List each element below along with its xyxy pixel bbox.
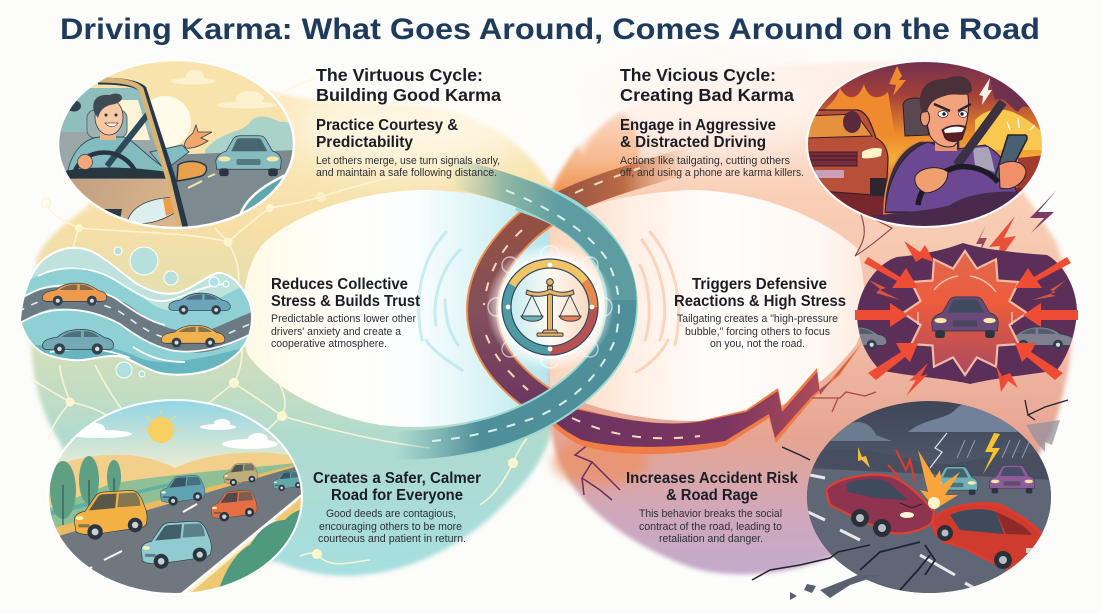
orange car	[42, 283, 107, 306]
driver head	[95, 99, 123, 135]
orange glow below lower road	[552, 438, 648, 486]
head rest	[903, 98, 929, 136]
indicator	[163, 198, 174, 216]
panel: vicious cycle lobe	[550, 60, 1071, 574]
steering wheel	[918, 167, 998, 205]
scene: flowing calm traffic	[15, 245, 255, 380]
scene: sunny safe highway	[45, 400, 305, 600]
arrow right	[1023, 303, 1078, 327]
subheading line 2: Stress & Builds Trust	[271, 293, 420, 310]
sun	[148, 417, 174, 443]
body line 3: on you, not the road.	[710, 338, 805, 350]
subheading line 1: Engage in Aggressive	[620, 117, 776, 134]
distant hills	[805, 450, 1055, 490]
subheading line 1: Increases Accident Risk	[626, 470, 798, 487]
rain	[957, 440, 1030, 458]
fist on wheel	[915, 168, 948, 193]
yellow verge	[45, 462, 305, 548]
road edge	[178, 495, 302, 597]
road dashes	[188, 174, 215, 188]
panel: virtuous cycle lobe	[30, 62, 552, 576]
eyes	[938, 111, 968, 117]
scene border	[48, 400, 302, 594]
subheading line 1: Triggers Defensive	[692, 276, 827, 293]
shouting mouth	[942, 125, 966, 142]
road	[45, 464, 305, 600]
body line 3: cooperative atmosphere.	[271, 338, 387, 350]
body line 3: retaliation and danger.	[659, 533, 763, 545]
pale teal car	[141, 521, 211, 569]
small interior mirror	[70, 100, 81, 112]
waving hand	[184, 125, 212, 148]
road edge	[482, 203, 560, 412]
white lightning	[930, 433, 947, 468]
road dashes	[484, 168, 700, 438]
body line 1: This behavior breaks the social	[639, 508, 782, 520]
explosion core	[928, 497, 940, 509]
yellow-orange car lower	[161, 325, 225, 348]
body line 2: bubble," forcing others to focus	[685, 326, 830, 338]
ear	[920, 110, 930, 126]
heading: the virtuous cycle: The Virtuous Cycle:	[316, 65, 483, 85]
grey shoulder highlight	[973, 147, 995, 172]
clouds	[171, 70, 277, 108]
lane dashes	[86, 478, 250, 571]
tan car	[224, 463, 257, 486]
angry brows	[934, 104, 971, 111]
road edge	[470, 195, 621, 438]
road dashes	[22, 302, 250, 338]
dashboard	[860, 192, 1022, 240]
heading line 2: Building Good Karma	[316, 85, 501, 105]
subheading line 1: Creates a Safer, Calmer	[313, 470, 481, 487]
white wave lines	[15, 268, 255, 362]
upper segment	[560, 160, 690, 205]
tree trunks	[63, 478, 114, 525]
sun rays	[142, 410, 181, 444]
smile	[105, 123, 118, 127]
dark vent	[104, 209, 122, 217]
arrow bottom-right	[1015, 343, 1063, 380]
orange lightning	[889, 66, 906, 96]
teal car	[160, 475, 205, 506]
steering wheel	[74, 152, 136, 174]
teal guard strip	[45, 478, 190, 517]
virtuous road crossing on top	[395, 172, 622, 445]
phone hand	[999, 161, 1026, 189]
small yellow bolt	[858, 447, 870, 468]
red bolts along rim	[904, 241, 1018, 396]
seat belt	[957, 102, 1003, 165]
spark cracks from lightning	[812, 392, 876, 412]
body line 1: Actions like tailgating, cutting others	[620, 155, 790, 167]
body line 1: Predictable actions lower other	[271, 313, 416, 325]
centre medallion: balance scales	[486, 243, 614, 371]
orange wedge under the upper road	[552, 112, 640, 205]
rubble	[790, 584, 816, 600]
scene border	[807, 61, 1043, 227]
lower road and lightning tail edge	[545, 343, 862, 454]
arrow top-left	[864, 257, 918, 288]
hand on wheel	[78, 154, 92, 170]
inner empty centre of left loop	[242, 190, 550, 427]
subheading line 2: Reactions & High Stress	[674, 293, 846, 310]
yellow lightning	[983, 433, 1000, 474]
purple car behind	[989, 465, 1035, 493]
clouds	[68, 419, 278, 449]
phone screen sparks	[1007, 118, 1035, 130]
window interior lower band	[59, 132, 158, 171]
speech tail	[855, 212, 892, 256]
scales icon	[521, 279, 581, 336]
body line 2: encouraging others to be more	[319, 521, 462, 533]
body line 3: courteous and patient in return.	[318, 533, 466, 545]
network nodes	[42, 192, 518, 559]
outer cracks	[752, 447, 870, 580]
text block: accident risk and road rage	[626, 470, 798, 545]
car door	[70, 178, 178, 227]
inner empty centre of right loop	[550, 190, 864, 421]
coloured ring: yellow arc	[512, 263, 585, 285]
petal halo	[488, 246, 612, 368]
body line 2: drivers' anxiety and create a	[271, 326, 402, 338]
pillar frame	[98, 81, 186, 232]
trees	[50, 456, 121, 519]
lane markings	[808, 475, 985, 594]
body line 1: Let others merge, use turn signals early,	[316, 155, 500, 167]
ring outlines	[502, 259, 598, 355]
body line 1: Tailgating creates a "high-pressure	[677, 313, 838, 325]
dark spiky blob	[857, 243, 1077, 384]
lower darker water	[34, 345, 240, 374]
small purple bolt	[976, 225, 987, 252]
cloud	[815, 422, 892, 441]
green grass strip	[45, 462, 305, 535]
ripple lines left of the medallion	[419, 232, 462, 370]
driver torso	[885, 142, 1020, 212]
eyes	[104, 114, 118, 116]
vicious road (under the teal road)	[482, 160, 876, 454]
arrow left	[855, 303, 908, 327]
seat back	[884, 141, 960, 214]
neck	[100, 132, 116, 140]
lower road and lightning tail fill	[548, 348, 858, 447]
text block: virtuous cycle heading and step one	[316, 65, 501, 179]
scene border	[58, 60, 294, 228]
subheading line 2: Predictability	[316, 134, 413, 151]
heading: the vicious cycle: The Vicious Cycle:	[620, 65, 776, 85]
ripple lines right of the medallion	[636, 232, 679, 372]
neck	[935, 135, 957, 151]
pale window light	[118, 100, 150, 140]
arrow top-right	[1015, 257, 1071, 288]
distant hills	[205, 116, 293, 154]
head rest	[87, 110, 127, 138]
blue car lower	[42, 329, 114, 354]
central burst	[903, 251, 1027, 375]
waving arm	[150, 145, 189, 170]
glow	[486, 243, 614, 371]
wing mirror	[177, 161, 207, 181]
road	[15, 298, 255, 342]
blue car	[169, 293, 230, 315]
ground crack	[860, 542, 935, 590]
network lines and nodes	[30, 78, 527, 564]
bubbles	[114, 247, 229, 378]
far teal car	[273, 471, 303, 491]
driver torso	[67, 136, 164, 172]
road	[172, 150, 292, 226]
lobe fill: yellow to teal band	[31, 62, 552, 576]
body line 2: off, and using a phone are karma killers.	[620, 167, 804, 179]
road dashes	[432, 190, 619, 441]
subheading line 1: Practice Courtesy &	[316, 117, 458, 134]
subheading line 2: & Road Rage	[666, 487, 758, 504]
lower right brown glow	[1018, 155, 1045, 195]
yellow glow near phone	[975, 109, 1045, 150]
arc around medallion	[482, 203, 560, 412]
red crashed car	[933, 503, 1051, 572]
text block: triggers defensive reactions	[674, 276, 846, 350]
scene: courteous driver waving	[55, 58, 297, 232]
body line 1: Good deeds are contagious,	[326, 508, 456, 520]
body line 2: and maintain a safe following distance.	[316, 167, 497, 179]
flames	[815, 84, 895, 140]
teal car behind	[932, 467, 978, 495]
road	[805, 468, 1055, 595]
ring dots	[506, 263, 594, 351]
side car left	[821, 327, 887, 350]
red sparks	[888, 450, 915, 482]
text block: reduces collective stress	[271, 276, 420, 350]
crack upper right	[1025, 400, 1068, 420]
central car	[932, 297, 998, 338]
teal water band	[22, 266, 251, 362]
oncoming teal car	[216, 136, 281, 176]
seat belt	[107, 114, 148, 166]
shard upper right	[1026, 420, 1060, 452]
phone	[994, 135, 1027, 182]
heading line 2: Creating Bad Karma	[620, 85, 794, 105]
maroon crashed car	[826, 475, 934, 537]
cracks in lower lobe	[575, 440, 620, 500]
white lightning	[979, 78, 992, 105]
large cloud	[908, 401, 1040, 432]
red bolt	[989, 216, 1016, 264]
dark dash strip	[66, 168, 166, 178]
lobe fill: peach to purple band	[550, 62, 1071, 574]
subheading line 2: & Distracted Driving	[620, 134, 766, 151]
title: Driving Karma: What Goes Around, Comes Around on the Road	[60, 13, 1040, 46]
subheading line 2: Road for Everyone	[331, 487, 463, 504]
hair	[93, 94, 122, 118]
explosion	[918, 450, 960, 510]
coloured ring: orange to red arc	[585, 281, 594, 307]
scene: car under pressure	[821, 190, 1078, 396]
window interior upper	[60, 88, 154, 142]
text block: vicious cycle heading and step one	[620, 65, 804, 179]
yellow car	[74, 490, 147, 540]
purple bolt top right	[1030, 190, 1057, 233]
red car ahead	[806, 110, 888, 196]
headlight	[127, 197, 176, 224]
driver head	[925, 90, 968, 147]
coloured ring: red to plum arc	[550, 307, 594, 351]
green bushes	[216, 508, 305, 600]
scene: angry distracted driver	[805, 60, 1045, 256]
hair	[920, 76, 972, 113]
pupils	[942, 112, 964, 116]
arrow bottom-left	[868, 343, 918, 380]
side car right	[1008, 327, 1074, 350]
upper segment fading into yellow	[440, 172, 622, 300]
pressure rings	[918, 276, 1012, 325]
yellow roadside	[182, 496, 305, 600]
pillar colour	[96, 80, 181, 232]
hills	[45, 453, 305, 520]
lower segment fading to the left	[395, 300, 622, 445]
scene outline	[20, 248, 252, 375]
text block: safer calmer road	[313, 470, 481, 545]
orange car	[211, 490, 257, 522]
body line 2: contract of the road, leading to	[639, 521, 782, 533]
subheading line 1: Reduces Collective	[271, 276, 408, 293]
road	[805, 188, 1045, 230]
grey crack shard	[820, 575, 880, 598]
scene: storm crash	[752, 400, 1068, 600]
side bolts	[869, 280, 1066, 300]
white curve and teal verge	[240, 174, 285, 214]
fade: pale wash behind the heading text	[290, 88, 530, 172]
medallion disc	[501, 258, 599, 356]
coloured ring: teal arc	[506, 285, 550, 351]
pale sun behind pillar	[150, 96, 191, 148]
fade: pale wash behind the heading text	[590, 60, 850, 150]
purple flame drops	[985, 60, 1045, 112]
